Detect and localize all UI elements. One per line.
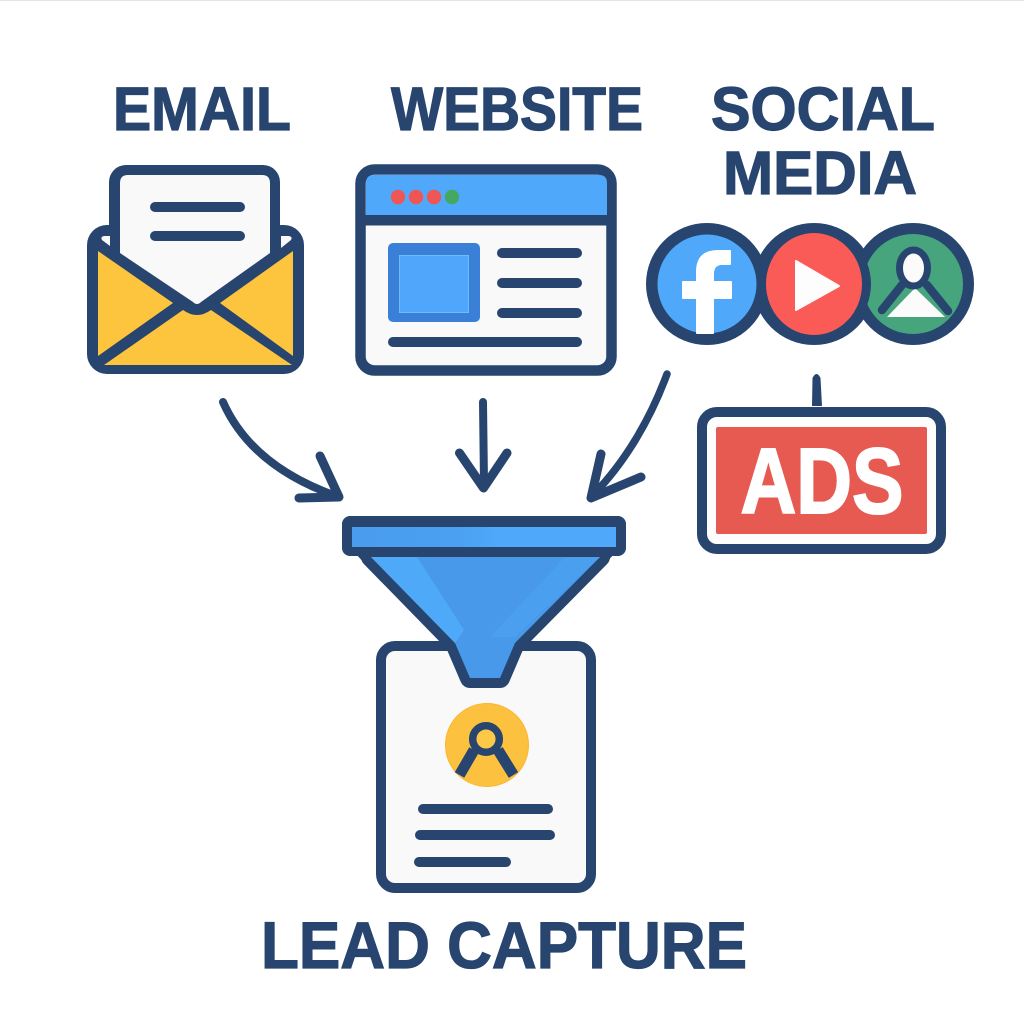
icon: ads banner — [702, 374, 941, 549]
arrow: social media to funnel — [591, 374, 667, 498]
icon: facebook badge — [658, 234, 756, 334]
heading: Social Media: MEDIA — [723, 139, 917, 207]
icon: ads banner: ADS — [740, 429, 904, 533]
heading: Email: EMAIL — [113, 75, 291, 143]
form text lines — [419, 809, 550, 862]
title: Lead Capture: LEAD CAPTURE — [261, 908, 747, 982]
arrow: website to funnel — [460, 402, 507, 488]
icon: play badge — [757, 227, 871, 341]
lead form document — [381, 646, 591, 888]
heading: Social Media — [711, 75, 935, 207]
heading: Website: WEBSITE — [391, 75, 643, 143]
icon: email envelope — [87, 165, 304, 374]
icon: photo profile badge — [863, 234, 963, 334]
heading: Social Media: SOCIAL — [711, 75, 935, 143]
arrow: email to funnel — [223, 402, 339, 498]
icon: website window — [360, 170, 612, 370]
icon: lead avatar — [446, 704, 528, 786]
icon: funnel — [342, 516, 626, 678]
icon: social media circles — [646, 223, 974, 345]
